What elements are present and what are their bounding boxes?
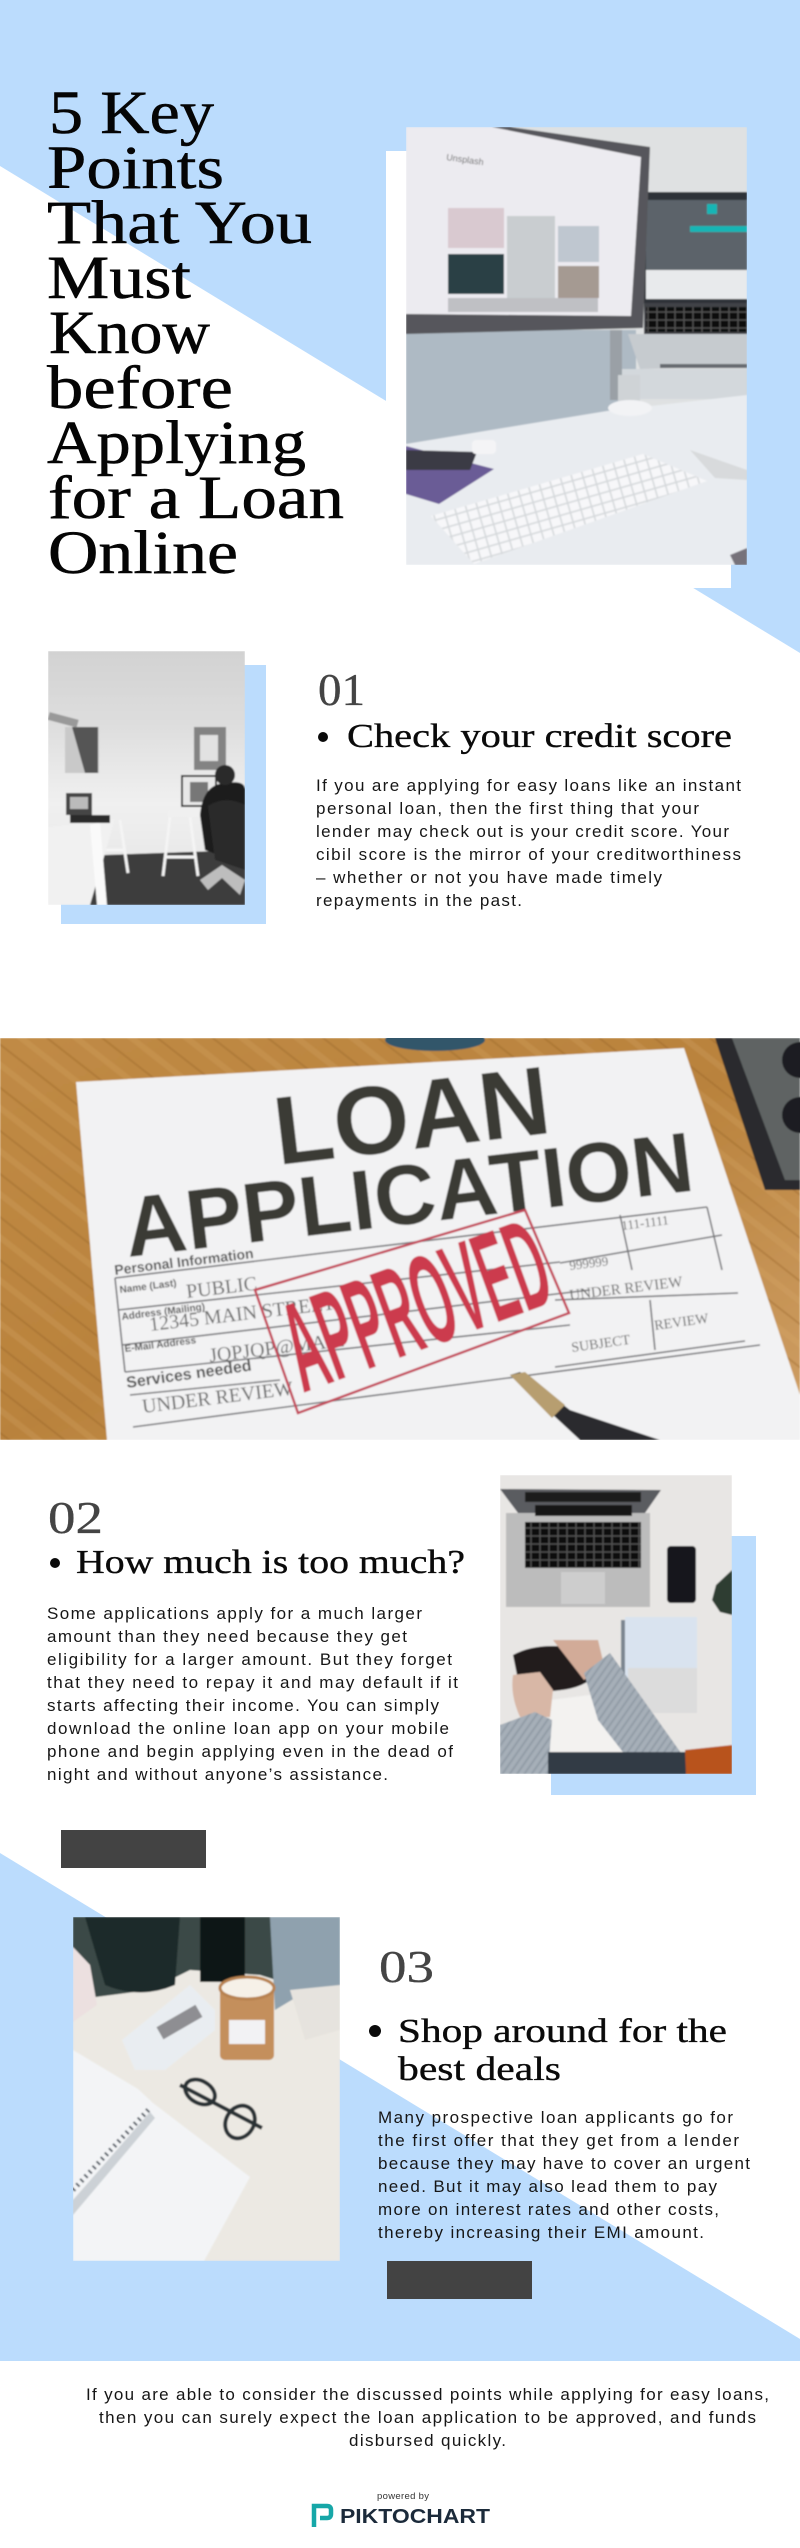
photo banner: loan application approved form: JQPJQP@MAIL xyxy=(208,1329,346,1367)
photo banner: loan application approved form: Address (Mailing) xyxy=(121,1302,206,1323)
conclusion text: disbursed quickly. xyxy=(349,2431,506,2450)
photo banner: loan application approved form: Services needed xyxy=(125,1358,253,1392)
panel: section 01 credit score xyxy=(48,651,741,924)
body text 02: that they need to repay it and may default if it xyxy=(47,1673,458,1692)
photo banner: loan application approved form: REVIEW xyxy=(653,1311,710,1334)
dark button placeholder 03 xyxy=(387,2261,532,2299)
section number 01: 01 xyxy=(318,664,365,715)
photo banner: loan application approved form: Name (Last) xyxy=(119,1278,177,1296)
body text 02: download the online loan app on your mobile xyxy=(47,1719,449,1738)
body text 02: night and without anyone’s assistance. xyxy=(47,1765,388,1784)
body text 02: amount than they need because they get xyxy=(47,1627,407,1646)
icon: piktochart mark xyxy=(314,2506,331,2527)
photo banner: loan application approved form: 12345 MAIN STREET xyxy=(148,1292,336,1336)
photo banner: loan application approved form: LOAN xyxy=(268,1045,556,1186)
photo: office room with man at desk, greyscale xyxy=(48,651,245,905)
body text 03 xyxy=(378,2108,750,2242)
photo banner: loan application approved form: 999999 xyxy=(569,1253,609,1273)
photo banner: loan application approved form: APPLICATION xyxy=(119,1115,698,1276)
body text 03: need. But it may also lead them to pay xyxy=(378,2177,718,2196)
conclusion text: If you are able to consider the discussed points while applying for easy loans, xyxy=(86,2385,769,2404)
background: lower blue diagonal xyxy=(0,1853,800,2361)
title: for a Loan xyxy=(48,465,344,532)
body text 01: If you are applying for easy loans like an instant xyxy=(316,776,741,795)
logo: powered by Piktochart xyxy=(314,2491,490,2528)
body text 03: Many prospective loan applicants go for xyxy=(378,2108,733,2127)
title: Points xyxy=(47,135,224,202)
body text 02: phone and begin applying even in the dead of xyxy=(47,1742,453,1761)
body text 01: cibil score is the mirror of your creditworthiness xyxy=(316,845,741,864)
heading: shop around for the best deals: Shop around for the xyxy=(398,2013,727,2050)
body text 03: more on interest rates and other costs, xyxy=(378,2200,719,2219)
title: before xyxy=(47,355,233,422)
section number 03: 03 xyxy=(379,1941,434,1992)
heading: shop around for the best deals xyxy=(369,2013,727,2088)
photo banner: loan application approved form: SUBJECT xyxy=(570,1333,632,1356)
body text 02: starts affecting their income. You can simply xyxy=(47,1696,440,1715)
body text 01: repayments in the past. xyxy=(316,891,522,910)
accent block behind photo 02 xyxy=(551,1536,756,1795)
conclusion text: then you can surely expect the loan application to be approved, and funds xyxy=(99,2408,756,2427)
heading: how much is too much: How much is too much? xyxy=(76,1544,465,1581)
body text 01: personal loan, then the first thing that your xyxy=(316,799,699,818)
photo banner: loan application approved form: UNDER REVIEW xyxy=(569,1274,684,1304)
body text 03: the first offer that they get from a lender xyxy=(378,2131,739,2150)
title xyxy=(47,80,344,587)
photo banner: loan application approved form: 111-1111 xyxy=(621,1212,669,1233)
section number 02: 02 xyxy=(48,1492,103,1543)
title: That You xyxy=(47,190,312,257)
title: Know xyxy=(49,300,210,367)
heading: shop around for the best deals: best deals xyxy=(398,2051,561,2088)
body text 02 xyxy=(47,1604,458,1784)
photo banner: loan application approved form xyxy=(0,1029,800,1440)
title: Applying xyxy=(47,410,306,477)
title: Online xyxy=(48,520,238,587)
body text 03: because they may have to cover an urgent xyxy=(378,2154,750,2173)
hero photo: desk with monitor, laptop and keyboard: Unsplash xyxy=(446,152,484,167)
body text 01 xyxy=(316,776,741,910)
logo: powered by Piktochart: powered by xyxy=(377,2491,429,2502)
heading: check your credit score: Check your credit score xyxy=(347,718,732,755)
conclusion text xyxy=(86,2385,769,2450)
title: Must xyxy=(47,245,191,312)
hero photo: desk with monitor, laptop and keyboard xyxy=(406,127,747,565)
body text 02: Some applications apply for a much larger xyxy=(47,1604,422,1623)
panel: section 03 shop around xyxy=(73,1917,750,2299)
accent block behind photo 01 xyxy=(61,665,266,924)
photo banner: loan application approved form: PUBLIC xyxy=(185,1273,258,1303)
body text 01: – whether or not you have made timely xyxy=(316,868,662,887)
body text 01: lender may check out is your credit score. Your xyxy=(316,822,729,841)
photo banner: loan application approved form: UNDER REVIEW xyxy=(141,1378,294,1418)
dark button placeholder 02 xyxy=(61,1830,206,1868)
white frame behind hero photo xyxy=(386,151,731,588)
panel: section 02 how much is too much xyxy=(47,1475,756,1868)
photo: laptop, phone and hands holding a wallet xyxy=(500,1475,732,1774)
background: top blue diagonal xyxy=(0,0,800,653)
logo: powered by Piktochart: PIKTOCHART xyxy=(340,2506,490,2528)
body text 02: eligibility for a larger amount. But they forget xyxy=(47,1650,452,1669)
body text 03: thereby increasing their EMI amount. xyxy=(378,2223,704,2242)
photo: candle, glasses, stapler and planner xyxy=(73,1917,340,2261)
photo banner: loan application approved form: E-Mail Address xyxy=(124,1335,197,1355)
photo banner: loan application approved form: Personal Information xyxy=(113,1245,254,1278)
title: 5 Key xyxy=(49,80,215,147)
